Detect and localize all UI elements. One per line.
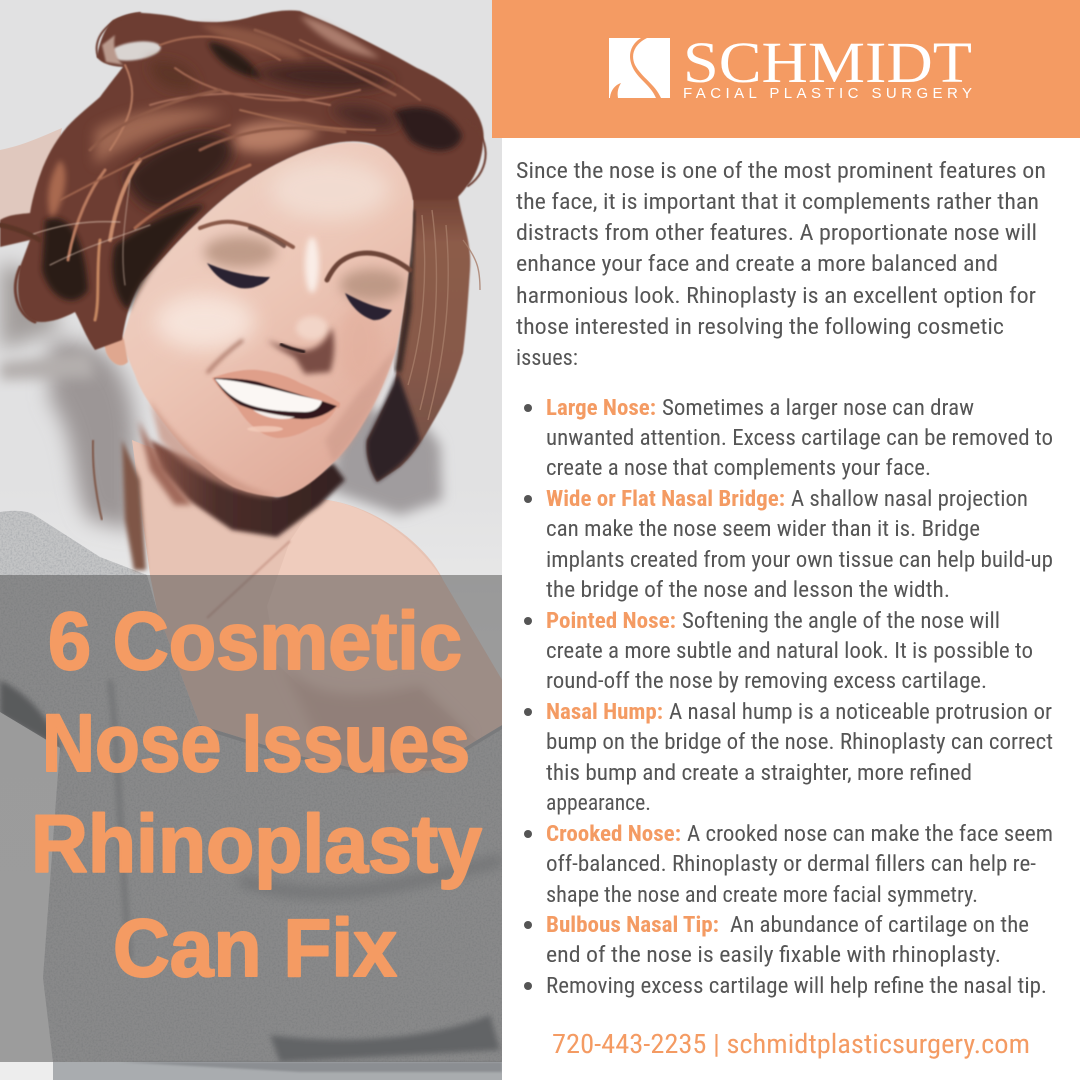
hair colour regions xyxy=(42,16,462,310)
list item: nasal hump: A nasal hump is a noticeable protrusion or xyxy=(669,700,1052,725)
list item: bulbous nasal tip: end of the nose is easily fixable with rhinoplasty. xyxy=(546,943,1001,968)
sweater xyxy=(0,500,502,1080)
list item: nasal hump: appearance. xyxy=(546,791,651,816)
list item: pointed nose: round-off the nose by removing excess cartilage. xyxy=(546,669,987,694)
list item: wide or flat nasal bridge: implants created from your own tissue can help build-up xyxy=(546,548,1053,573)
intro paragraph: the face, it is important that it complements rather than xyxy=(516,190,1039,215)
list item: pointed nose xyxy=(524,609,1033,694)
list item: large nose: Sometimes a larger nose can draw xyxy=(662,396,974,421)
list item: nasal hump: bump on the bridge of the nose. Rhinoplasty can correct xyxy=(546,730,1053,755)
intro paragraph: enhance your face and create a more balanced and xyxy=(516,252,998,277)
list item: crooked nose xyxy=(524,822,1053,908)
list item: large nose: unwanted attention. Excess cartilage can be removed to xyxy=(546,426,1053,451)
nose shadow xyxy=(267,327,334,374)
list item: crooked nose: off-balanced. Rhinoplasty or dermal fillers can help re- xyxy=(546,852,1036,877)
neck and chest xyxy=(132,440,502,771)
list item: bulbous nasal tip: An abundance of cartilage on the xyxy=(730,913,1029,938)
closed eyes xyxy=(207,263,392,320)
photo: smiling woman with auburn hair xyxy=(0,0,502,1080)
logo wordmark: SCHMIDT xyxy=(683,30,972,95)
list item: wide or flat nasal bridge: A shallow nasal projection xyxy=(791,487,1028,512)
list item: crooked nose: A crooked nose can make the face seem xyxy=(687,822,1053,847)
list item: pointed nose: Pointed Nose: xyxy=(546,609,676,634)
title: Can Fix xyxy=(113,903,397,994)
title xyxy=(31,596,482,994)
list item: crooked nose: Crooked Nose: xyxy=(546,822,681,847)
eye shadow lids xyxy=(204,236,404,301)
face xyxy=(122,143,413,497)
ear xyxy=(104,336,128,366)
title: 6 Cosmetic xyxy=(48,596,462,687)
footer contact line: 720-443-2235 | schmidtplasticsurgery.com xyxy=(552,1028,1030,1060)
intro paragraph: Since the nose is one of the most prominent features on xyxy=(516,159,1046,184)
eyebrows xyxy=(200,222,410,280)
list item: wide or flat nasal bridge: the bridge of the nose and lesson the width. xyxy=(546,578,950,603)
list item: nasal hump xyxy=(524,700,1053,816)
list item: wide or flat nasal bridge xyxy=(524,487,1053,603)
raised arm xyxy=(0,128,62,222)
list item: removing excess cartilage: Removing excess cartilage will help refine the nasal tip. xyxy=(546,974,1047,999)
list item: bulbous nasal tip xyxy=(524,913,1029,968)
list item: large nose xyxy=(524,396,1053,481)
title: Nose Issues xyxy=(42,698,470,789)
translucent band behind title xyxy=(0,575,502,1062)
list item: wide or flat nasal bridge: can make the nose seem wider than it is. Bridge xyxy=(546,517,980,542)
intro paragraph xyxy=(516,159,1046,371)
shoulder xyxy=(278,500,439,575)
mouth xyxy=(212,370,340,438)
list item: pointed nose: create a more subtle and natural look. It is possible to xyxy=(546,639,1033,664)
intro paragraph: issues: xyxy=(516,346,578,371)
list item: pointed nose: Softening the angle of the nose will xyxy=(682,609,1000,634)
title: Rhinoplasty xyxy=(31,799,482,890)
list item: large nose: create a nose that complements your face. xyxy=(546,456,931,481)
list item: bulbous nasal tip: Bulbous Nasal Tip: xyxy=(546,913,719,938)
icon: logo nose mark xyxy=(609,38,670,98)
hair strands xyxy=(0,13,486,322)
wall shadows xyxy=(0,262,442,530)
neck hair strand xyxy=(122,440,146,570)
list item: crooked nose: shape the nose and create more facial symmetry. xyxy=(546,883,978,908)
logo tagline: FACIAL PLASTIC SURGERY xyxy=(683,85,972,102)
face highlights and shading xyxy=(150,160,397,497)
list item: wide or flat nasal bridge: Wide or Flat Nasal Bridge: xyxy=(546,487,785,512)
list item: nasal hump: Nasal Hump: xyxy=(546,700,663,725)
intro paragraph: harmonious look. Rhinoplasty is an excellent option for xyxy=(516,284,1036,309)
intro paragraph: those interested in resolving the following cosmetic xyxy=(516,315,1004,340)
main hair mass xyxy=(0,10,484,350)
neck shadow xyxy=(150,440,345,537)
list item: nasal hump: this bump and create a straighter, more refined xyxy=(546,761,972,786)
intro paragraph: distracts from other features. A proportionate nose will xyxy=(516,221,1037,246)
header band with logo xyxy=(492,0,1080,138)
right side hair xyxy=(367,190,470,482)
list item: large nose: Large Nose: xyxy=(546,396,656,421)
